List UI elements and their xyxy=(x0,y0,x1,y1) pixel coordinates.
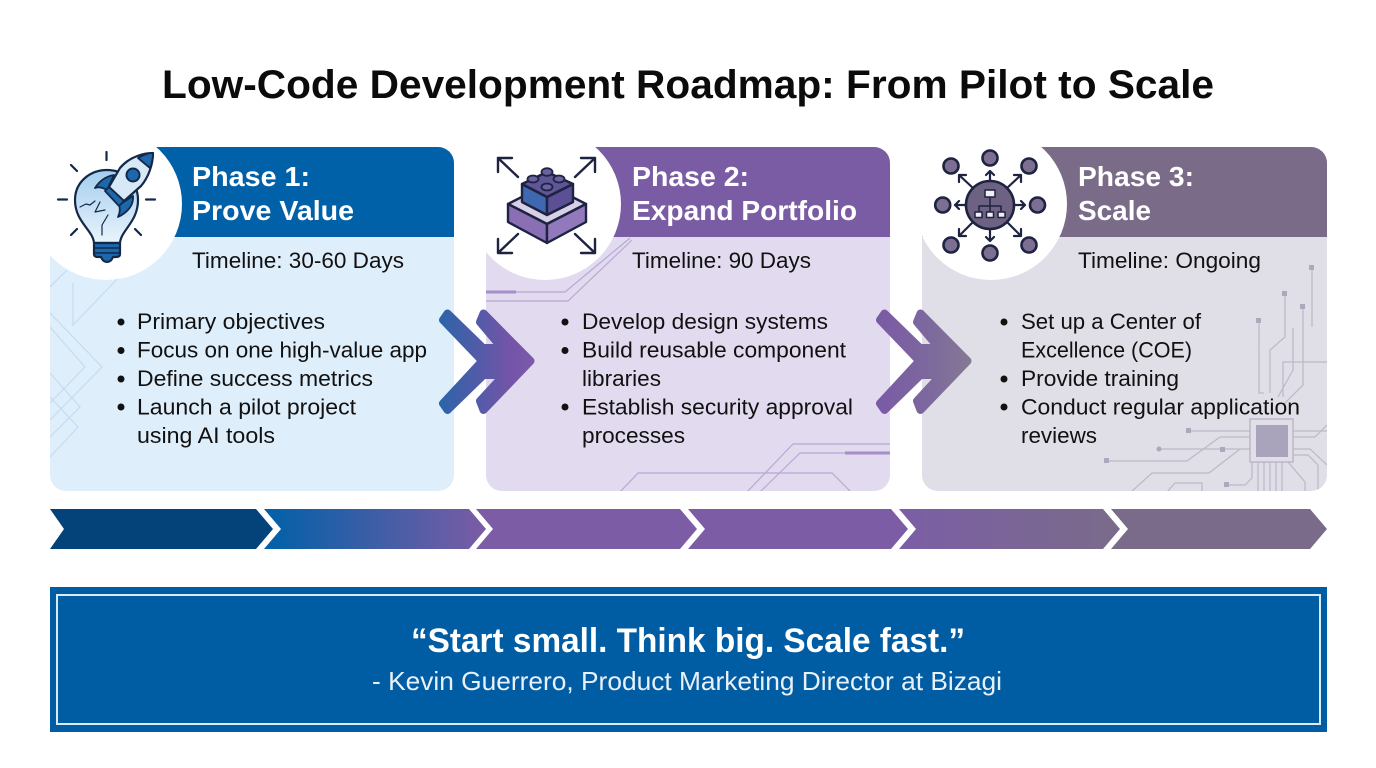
phase 1 bullet list: Define success metrics xyxy=(137,366,373,391)
phase 3 bullet list: Excellence (COE) xyxy=(1021,338,1192,362)
phase 1 heading: Phase 1: xyxy=(192,161,310,192)
arrow: phase 2 to phase 3 xyxy=(880,314,968,410)
phase 1 bullet list: Focus on one high-value app xyxy=(137,338,427,362)
phase 3 bullet list: Provide training xyxy=(1021,366,1179,391)
icon: light bulb with rocket xyxy=(58,152,155,262)
phase 3 bullet list: Conduct regular application xyxy=(1021,394,1300,420)
phase 2 bullet list: Build reusable component xyxy=(582,338,846,362)
phase 2 bullet list: Develop design systems xyxy=(582,309,828,334)
quote text: “Start small. Think big. Scale fast.” xyxy=(411,622,965,660)
icon: expanding building block xyxy=(498,158,595,253)
phase 3 bullet list: reviews xyxy=(1021,423,1097,448)
phase 3 timeline: Timeline: Ongoing xyxy=(1078,248,1261,273)
phase 2 heading xyxy=(632,161,857,226)
phase 1 bullet list xyxy=(118,309,427,448)
arrow: phase 1 to phase 2 xyxy=(443,314,530,410)
phase 2 bullet list xyxy=(562,309,853,448)
panel: phase 2 xyxy=(469,128,890,492)
panel: phase 3 xyxy=(915,128,1327,492)
phase 1 timeline: Timeline: 30-60 Days xyxy=(192,248,404,273)
phase 2 timeline: Timeline: 90 Days xyxy=(632,248,811,273)
title: Low-Code Development Roadmap: From Pilot to Scale xyxy=(162,63,1214,107)
quote banner xyxy=(50,587,1327,732)
phase 2 bullet list: Establish security approval xyxy=(582,394,853,420)
phase 3 heading xyxy=(1078,161,1194,226)
panel: phase 1 xyxy=(30,128,454,491)
phase 1 heading xyxy=(192,161,354,226)
phase 2 heading: Phase 2: xyxy=(632,161,749,192)
timeline chevron bar xyxy=(50,509,1327,549)
phase 2 bullet list: processes xyxy=(582,423,685,448)
phase 1 bullet list: using AI tools xyxy=(137,423,275,448)
phase 1 bullet list: Launch a pilot project xyxy=(137,394,356,420)
phase 2 bullet list: libraries xyxy=(582,366,661,391)
phase 3 heading: Scale xyxy=(1078,195,1151,226)
phase 1 bullet list: Primary objectives xyxy=(137,309,325,334)
phase 3 heading: Phase 3: xyxy=(1078,161,1194,192)
phase 3 bullet list: Set up a Center of xyxy=(1021,309,1202,334)
phase 3 bullet list xyxy=(1000,309,1300,448)
quote attribution: - Kevin Guerrero, Product Marketing Director at Bizagi xyxy=(372,666,1002,696)
phase 1 heading: Prove Value xyxy=(192,195,354,226)
icon: hub network xyxy=(935,150,1045,260)
phase 2 heading: Expand Portfolio xyxy=(632,195,857,226)
